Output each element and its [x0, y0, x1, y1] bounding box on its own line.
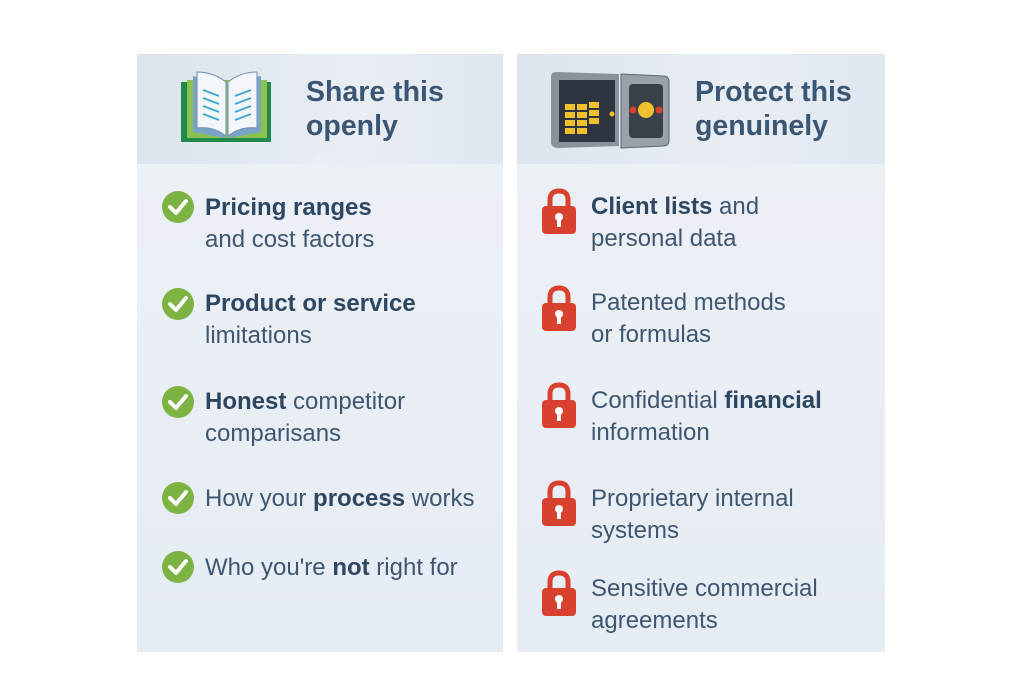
- panel: protect genuinely: [517, 54, 885, 652]
- item 2: limitations: [205, 322, 312, 349]
- item 3: Confidential financial: [591, 387, 822, 414]
- item 4: How your process works: [205, 485, 474, 512]
- lock icons: [542, 188, 576, 616]
- item 2: [591, 289, 786, 348]
- item 3: [205, 388, 405, 447]
- item 3: information: [591, 419, 710, 446]
- item 1: Pricing ranges: [205, 194, 372, 221]
- item 5: [591, 575, 818, 634]
- item 2: [205, 290, 416, 349]
- item 2: or formulas: [591, 321, 711, 348]
- item 3: comparisans: [205, 420, 341, 447]
- item list: protect: [591, 193, 822, 634]
- item 2: Patented methods: [591, 289, 786, 316]
- item 4: systems: [591, 517, 679, 544]
- heading: share this openly: openly: [306, 110, 398, 142]
- check icons: [162, 191, 194, 583]
- header: share: [137, 54, 503, 164]
- header: protect: [517, 54, 885, 164]
- item 4: [591, 485, 794, 544]
- item 4: Proprietary internal: [591, 485, 794, 512]
- heading: protect this genuinely: [695, 76, 852, 142]
- item 1: personal data: [591, 225, 736, 252]
- item 5: agreements: [591, 607, 718, 634]
- panel: share openly: [137, 54, 503, 652]
- item list: share: [205, 194, 474, 581]
- item 1: [591, 193, 759, 252]
- item 5: Who you're not right for: [205, 554, 458, 581]
- pointer: [310, 150, 334, 164]
- icon: book: [181, 72, 271, 142]
- heading: share this openly: Share this: [306, 76, 444, 108]
- item 1: Client lists and: [591, 193, 759, 220]
- item 3: Honest competitor: [205, 388, 405, 415]
- item 3: [591, 387, 822, 446]
- heading: protect this genuinely: Protect this: [695, 76, 852, 108]
- heading: protect this genuinely: genuinely: [695, 110, 828, 142]
- item 2: Product or service: [205, 290, 416, 317]
- item 5: Sensitive commercial: [591, 575, 818, 602]
- item 1: and cost factors: [205, 226, 374, 253]
- icon: safe: [551, 72, 670, 148]
- heading: share this openly: [306, 76, 444, 142]
- item 1: [205, 194, 374, 253]
